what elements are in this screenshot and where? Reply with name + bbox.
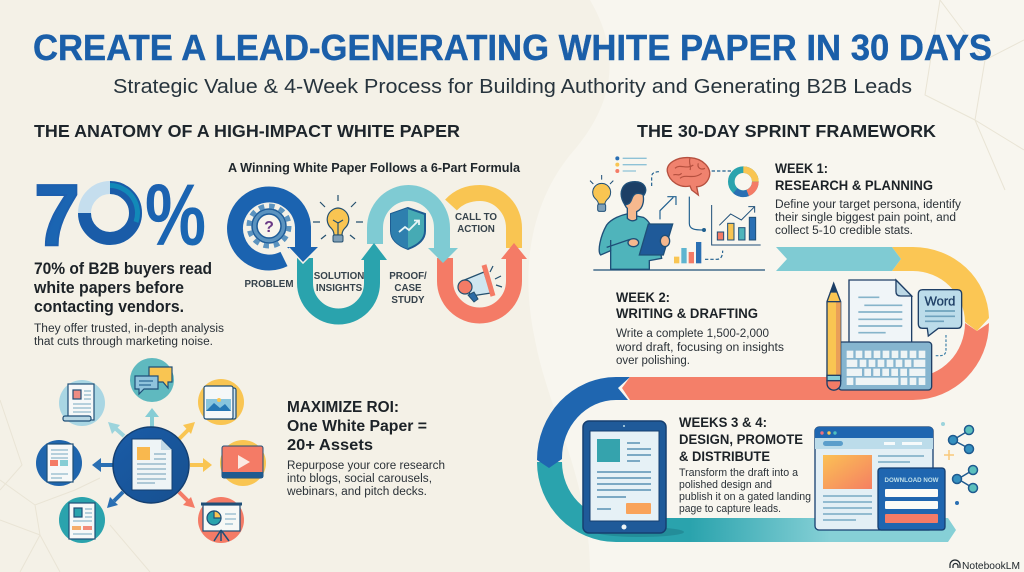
diagram: repurposing hub [36,358,266,543]
week 1 heading: WEEK 1: [775,161,828,176]
title: CREATE A LEAD-GENERATING WHITE PAPER IN 30 DAYS [33,27,992,68]
text: maximize ROI: 20+ Assets [287,437,373,454]
week 2 description: over polishing. [616,355,690,367]
word bubble: Word [925,293,955,308]
donut [731,170,755,194]
brain [667,158,710,195]
list [615,156,647,173]
text: maximize ROI [287,399,427,454]
keyboard [838,342,932,390]
icon: share top [948,426,974,454]
big stat: 70%: 7 [34,167,80,264]
text: maximize ROI: MAXIMIZE ROI: [287,399,399,416]
week 2 heading: WRITING & DRAFTING [616,306,758,321]
icon: social post [204,386,236,419]
labels: formula steps: CALL TO [455,212,497,223]
week 1 description: collect 5-10 credible stats. [775,225,913,237]
small bars [674,257,679,263]
big stat: 70%: % [145,167,206,264]
week 3 and 4 description [679,467,811,515]
connectors [652,171,732,259]
icon: shield [391,208,425,249]
arc: light teal [375,193,458,263]
labels: formula steps [244,212,497,306]
labels: formula steps: PROBLEM [244,279,294,290]
icon: chat bubbles [135,367,172,394]
week 3 and 4 heading [679,415,803,464]
week 1 heading [775,161,933,193]
hub circle with document [113,427,189,503]
illustration: tablet [583,421,684,537]
arc: yellow [451,193,514,248]
heading: anatomy: THE ANATOMY OF A HIGH-IMPACT WHITE PAPER [34,121,460,141]
stat description: that cuts through marketing noise. [34,336,213,348]
week 3 and 4 description: polished design and [679,479,772,491]
week 1 description: their single biggest pain point, and [775,212,956,224]
icon: gear with question mark [249,206,289,246]
week 1 description [775,199,961,237]
arc: coral [445,243,527,316]
arrows from hub [92,408,212,508]
subtitle: Strategic Value & 4-Week Process for Building Authority and Generating B2B Leads [113,76,912,98]
ribbon: light teal [776,247,901,271]
week 2 description [615,328,784,367]
labels: formula steps: INSIGHTS [316,283,363,294]
labels: formula steps: PROOF/ [389,271,427,282]
stat headline [33,260,212,316]
stat headline: contacting vendors. [34,298,184,316]
icon: report page left [47,444,73,482]
floor [593,268,765,272]
icon: megaphone [458,265,502,302]
bar chart [712,205,761,245]
chart: 6-part formula S-curve [235,193,527,316]
person [599,182,673,269]
illustration: writing tools [827,280,962,390]
labels: formula steps: SOLUTION [314,271,364,282]
text: maximize ROI: One White Paper = [287,418,427,435]
week 2 description: Write a complete 1,500-2,000 [616,328,769,340]
week 2 description: word draft, focusing on insights [615,342,784,354]
text: repurpose description [286,460,445,498]
stat headline: white papers before [33,279,184,297]
labels: formula steps: ACTION [457,224,495,235]
donut: 70 percent [84,185,138,239]
week 3 and 4 heading: WEEKS 3 & 4: [679,415,767,430]
browser window [815,427,933,530]
illustration: research person and data [590,156,765,270]
week 1 description: Define your target persona, identify [775,199,961,211]
icon: report page lower left [69,503,95,539]
document [849,280,912,343]
big stat: 70% [34,167,206,264]
formula heading: A Winning White Paper Follows a 6-Part Formula [228,160,521,175]
pencil [827,283,841,390]
process ribbon [537,247,989,542]
week 2 heading: WEEK 2: [616,290,670,305]
text: repurpose description: Repurpose your core research [287,460,445,472]
download form card: DOWNLOAD NOW [884,478,939,484]
week 3 and 4 description: page to capture leads. [679,503,781,515]
stat headline: 70% of B2B buyers read [34,260,212,278]
labels: formula steps: STUDY [391,295,425,306]
week 1 heading: RESEARCH & PLANNING [775,178,933,193]
text: repurpose description: webinars, and pitch decks. [286,486,427,498]
arc: blue [235,194,319,263]
icon: share bottom [952,466,978,492]
stat description: They offer trusted, in-depth analysis [34,323,224,335]
week 2 heading [616,290,758,321]
brand: NotebookLM: NotebookLM [962,560,1020,572]
icon: gear with question mark: ? [264,219,274,236]
icon: report page upper left [63,384,94,421]
week 3 and 4 description: publish it on a gated landing [679,491,811,503]
ribbon: coral [622,323,989,400]
ribbon: teal final [537,462,956,542]
week 3 and 4 heading: DESIGN, PROMOTE [679,432,803,447]
bulb [590,175,613,211]
heading: sprint framework: THE 30-DAY SPRINT FRAMEWORK [637,121,936,141]
illustration: landing page [815,427,945,530]
arc: teal [305,243,387,316]
icon: video player [222,446,263,478]
week 3 and 4 heading: & DISTRIBUTE [679,449,770,464]
labels: formula steps: CASE [394,283,422,294]
week 3 and 4 description: Transform the draft into a [679,467,799,479]
ribbon: blue [537,377,630,468]
stat description [34,323,224,348]
text: repurpose description: into blogs, social carousels, [287,473,432,485]
icon: presentation [201,504,242,541]
ribbon: yellow [892,247,989,331]
satellite circles [130,358,174,402]
icon: light bulb [313,195,363,242]
